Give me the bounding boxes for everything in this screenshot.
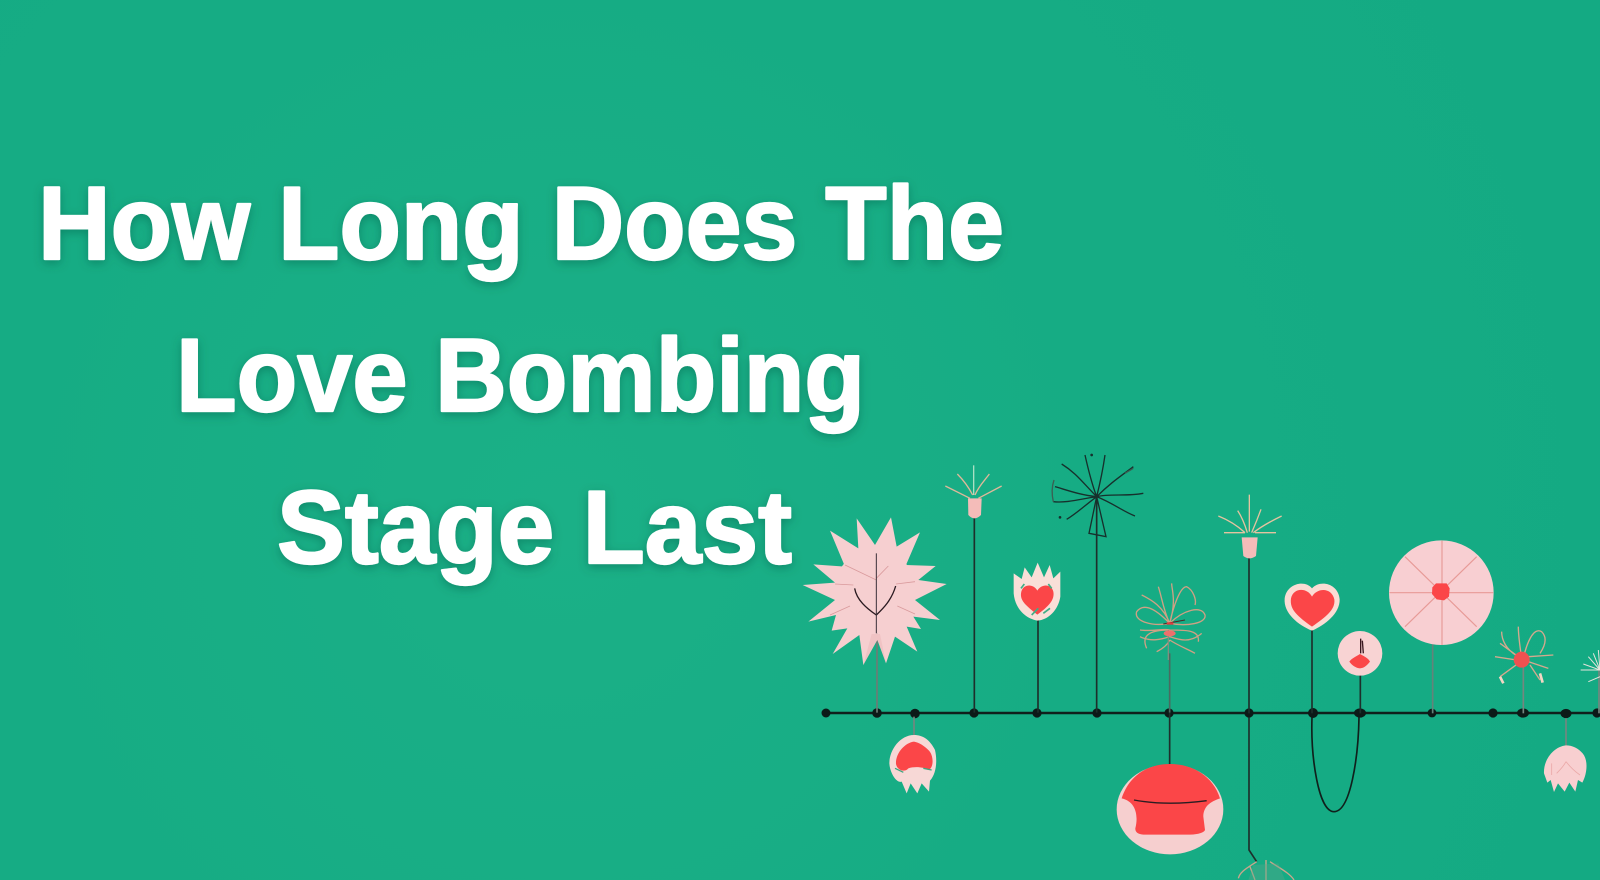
bud: pink hanging bud xyxy=(1544,718,1587,792)
title: How Long Does The xyxy=(38,166,1004,282)
flower: white dandelion, cropped xyxy=(1581,650,1600,713)
flower: heart tulip xyxy=(1014,563,1060,713)
connector: long stem to cropped flower xyxy=(1249,717,1257,862)
flower: ornate tan blossom xyxy=(1136,583,1205,713)
flower: pink starburst xyxy=(803,517,947,713)
title: Love Bombing xyxy=(176,318,865,434)
title xyxy=(38,166,1004,586)
flower: dark dandelion xyxy=(1052,454,1143,713)
bud: hanging heart bud xyxy=(889,717,936,793)
connector: U-shaped loop xyxy=(1312,717,1359,812)
flower: tall pink bud with rays xyxy=(945,465,1002,713)
flower: small round bud xyxy=(1338,631,1382,713)
flower: large round pink blossom xyxy=(1389,540,1494,713)
timeline illustration xyxy=(803,454,1600,880)
title: Stage Last xyxy=(277,470,792,586)
timeline axis xyxy=(822,708,1600,718)
flower: tan neuron blossom xyxy=(1495,627,1553,713)
flower: bud with pale rays xyxy=(1218,495,1282,713)
bud: large red ball xyxy=(1117,713,1223,854)
flower: cropped bottom blossom xyxy=(1238,860,1294,880)
flower: heart xyxy=(1285,584,1340,713)
